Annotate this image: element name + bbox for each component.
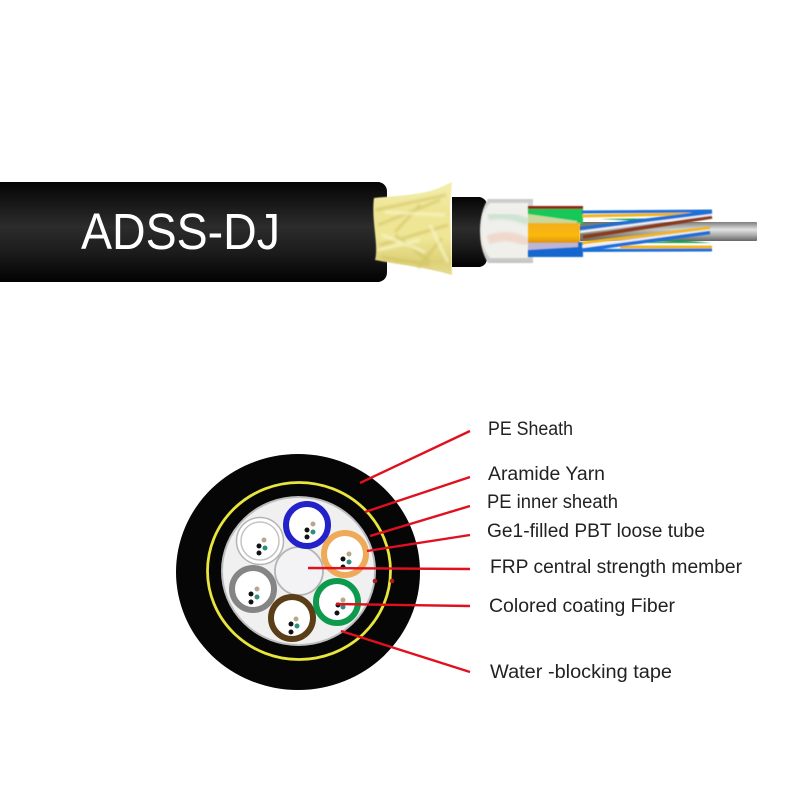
- outer PE sheath: [0, 182, 387, 282]
- PE inner sheath: [452, 197, 487, 267]
- tube: green: [316, 581, 358, 623]
- water-blocking tape: [480, 199, 533, 263]
- loose tubes: [528, 206, 583, 257]
- outer sheath ring: [176, 454, 420, 690]
- cable side view: [0, 182, 757, 282]
- water-blocking tape core: [222, 497, 375, 645]
- tube: gray: [232, 568, 274, 610]
- aramide yarn: [373, 182, 452, 275]
- central strength member: [275, 547, 323, 595]
- tube: orange: [324, 533, 366, 575]
- leader lines: [308, 431, 470, 672]
- label: PE inner sheath: PE inner sheath: [487, 492, 618, 513]
- label: central strength member: FRP central strength member: [490, 557, 743, 578]
- tube: white: [236, 518, 284, 564]
- label: water-blocking tape: Water -blocking tape: [490, 662, 672, 683]
- label: aramide yarn: Aramide Yarn: [488, 464, 605, 485]
- labels: [487, 419, 743, 683]
- aramide yarn ring: [208, 482, 390, 660]
- label: PE sheath: PE Sheath: [488, 419, 573, 440]
- central strength rod: [580, 222, 757, 241]
- label: loose tube: Ge1-filled PBT loose tube: [487, 521, 705, 542]
- red marker dots: [373, 579, 394, 583]
- label: colored fiber: Colored coating Fiber: [489, 596, 676, 617]
- tube: brown: [271, 597, 313, 639]
- cable cross-section: [176, 454, 420, 690]
- tube: blue: [286, 504, 328, 546]
- cable name: ADSS-DJ: [81, 203, 280, 260]
- optical fibers: [580, 211, 712, 250]
